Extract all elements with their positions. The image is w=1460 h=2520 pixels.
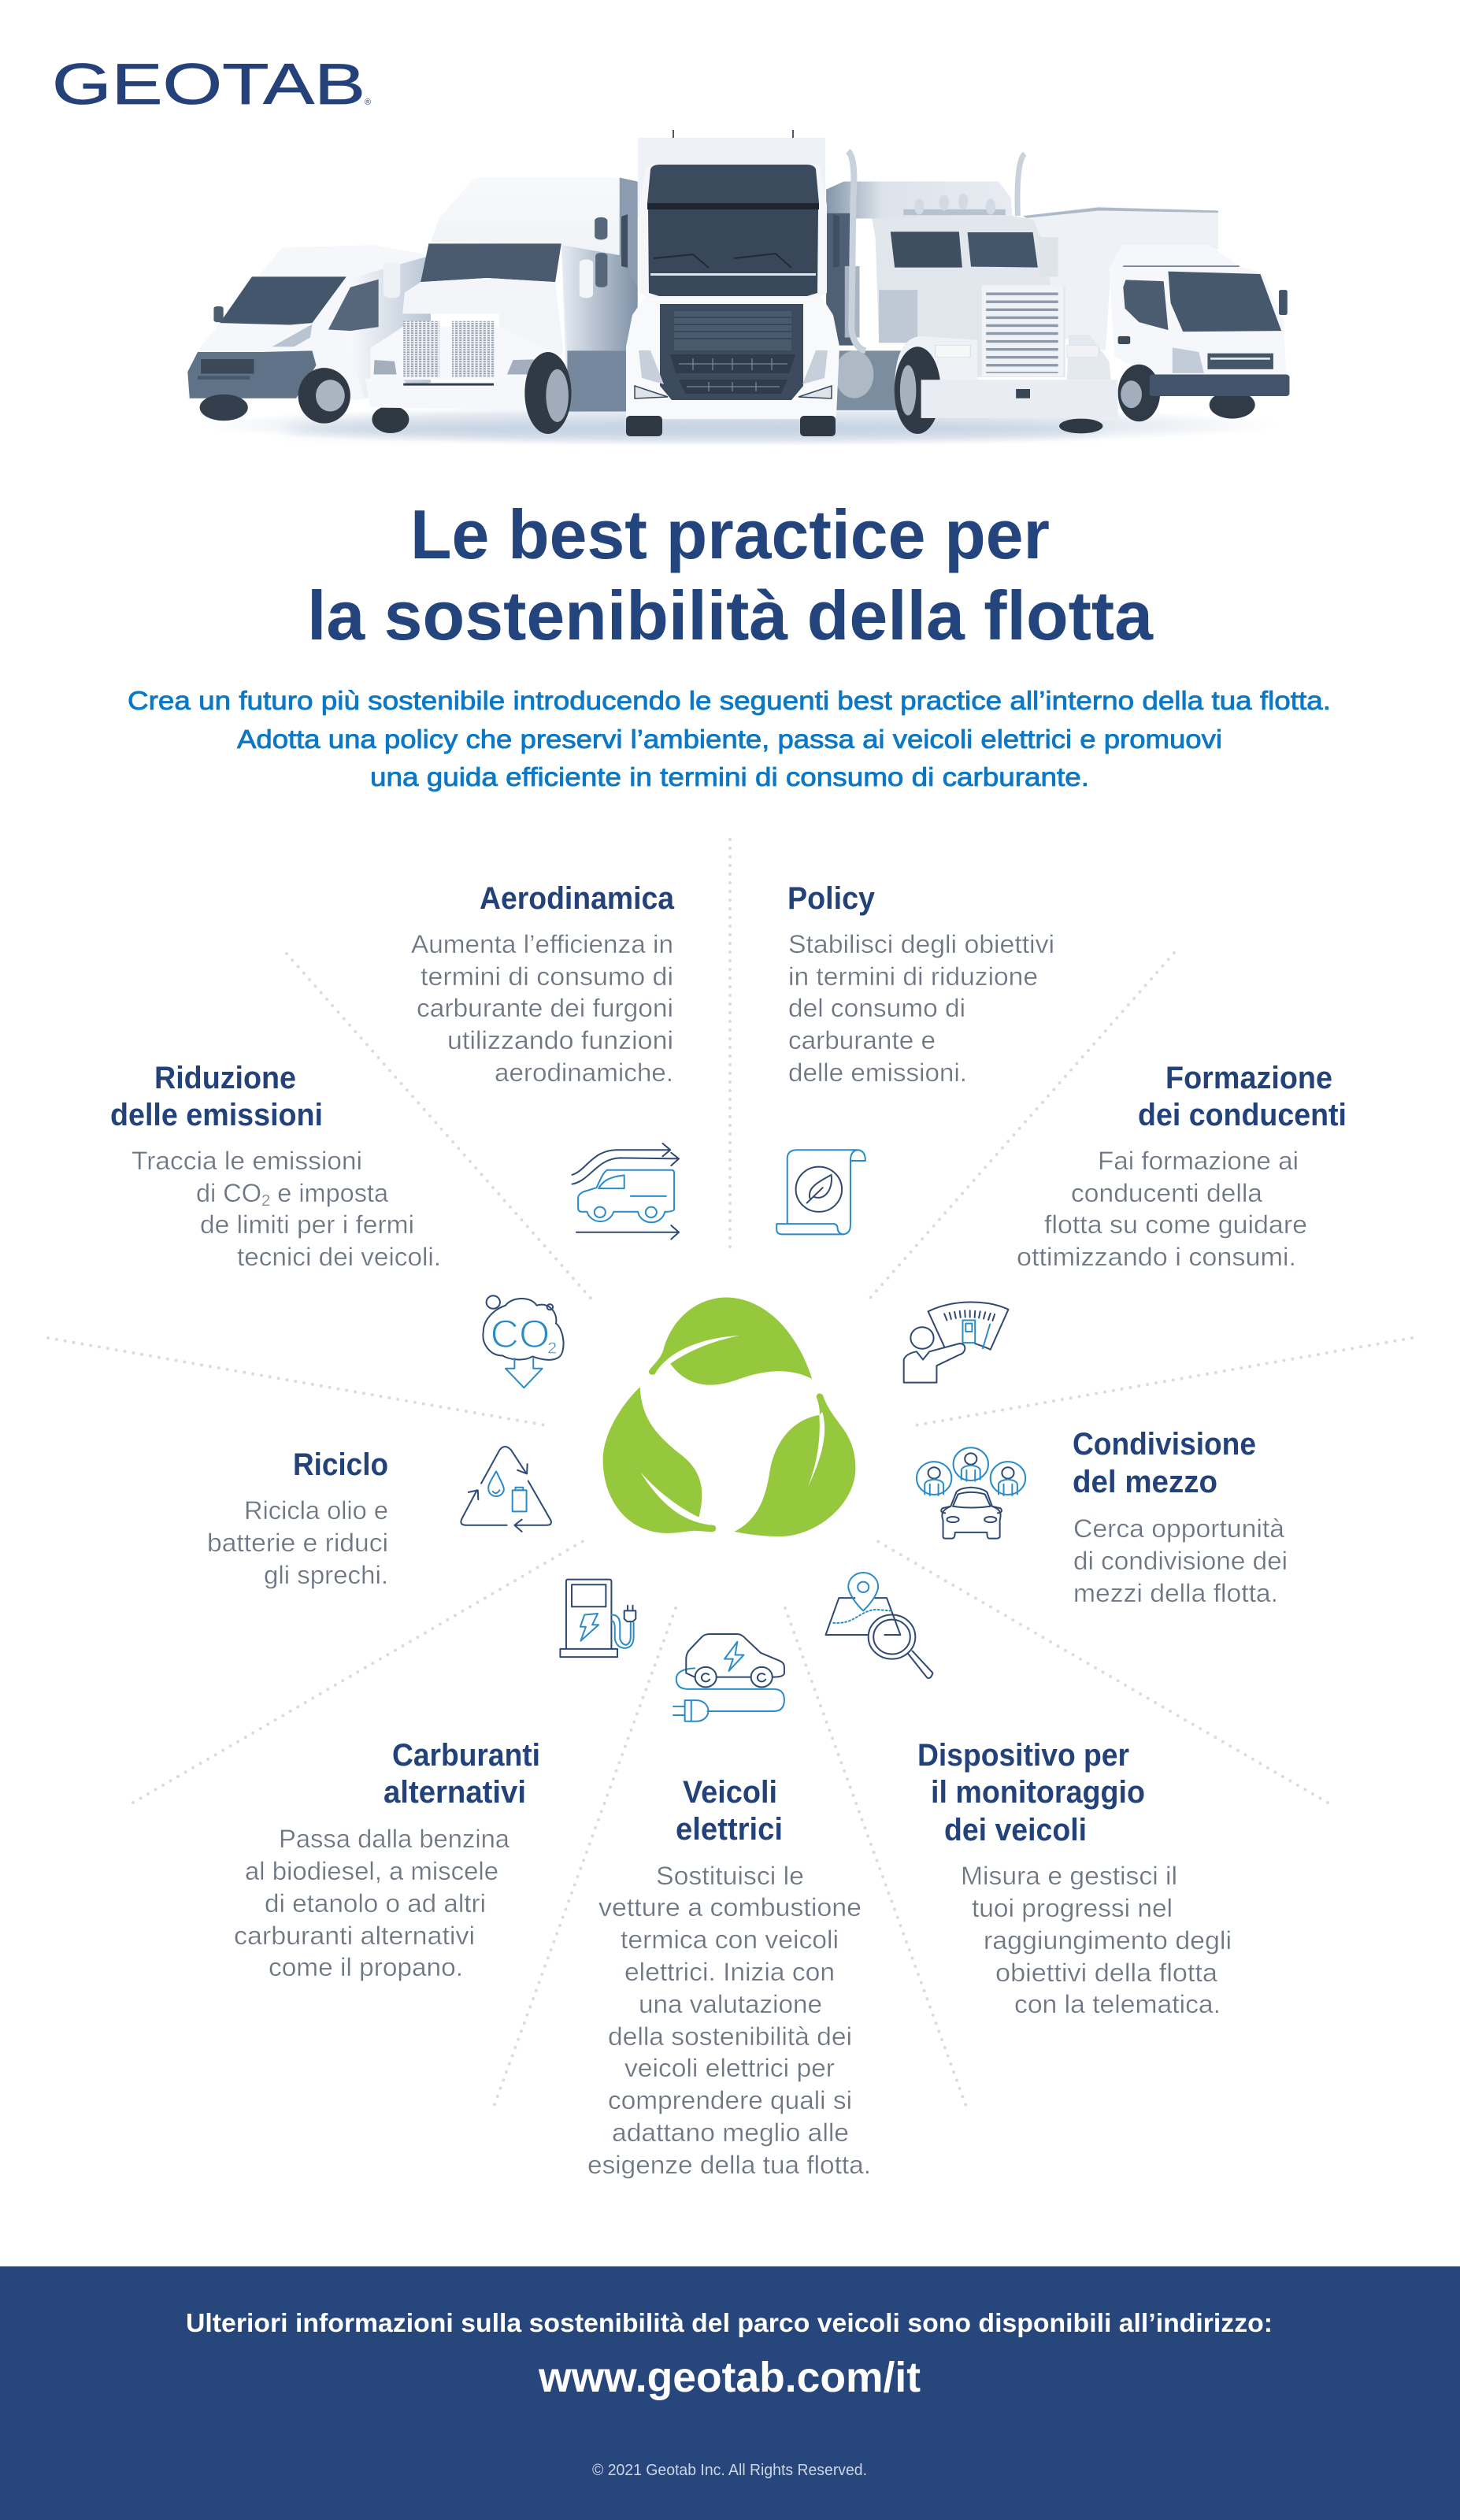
copyright: © 2021 Geotab Inc. All Rights Reserved. bbox=[592, 2462, 867, 2479]
heading: Dispositivo per bbox=[917, 1738, 1129, 1773]
text block: Aumenta l’efficienza in bbox=[411, 930, 673, 958]
heading: alternativi bbox=[384, 1775, 526, 1810]
leaf: top bbox=[649, 1297, 812, 1385]
text block: Cerca opportunità bbox=[1073, 1514, 1284, 1543]
text block bbox=[587, 1862, 871, 2179]
heading: del mezzo bbox=[1073, 1465, 1217, 1499]
panel: Riciclo bbox=[207, 1447, 551, 1589]
text block: carburante e bbox=[788, 1026, 936, 1054]
text block: delle emissioni. bbox=[788, 1058, 967, 1087]
text block: della sostenibilità dei bbox=[608, 2022, 852, 2051]
icon: van with airflow arrows bbox=[573, 1143, 679, 1239]
subtitle bbox=[128, 686, 1331, 791]
icon: CO2 cloud with down arrow bbox=[483, 1295, 564, 1388]
heading: dei veicoli bbox=[944, 1813, 1087, 1847]
text block: utilizzando funzioni bbox=[447, 1026, 673, 1054]
heading: Veicoli bbox=[683, 1775, 777, 1810]
vehicle: aerodynamic semi truck bbox=[365, 178, 638, 434]
text block bbox=[207, 1496, 388, 1589]
icon: policy scroll with leaf bbox=[776, 1150, 865, 1234]
text block: raggiungimento degli bbox=[984, 1926, 1232, 1955]
text block: in termini di riduzione bbox=[788, 962, 1038, 991]
subtitle: Adotta una policy che preservi l’ambiente, passa ai veicoli elettrici e promuovi bbox=[237, 724, 1222, 754]
heading: delle emissioni bbox=[110, 1098, 323, 1132]
icon: recycling triangle with oil drop and battery bbox=[461, 1447, 551, 1532]
footer call to action: Ulteriori informazioni sulla sostenibilità del parco veicoli sono disponibili all’indirizzo: bbox=[186, 2308, 1273, 2337]
heading bbox=[384, 1738, 540, 1810]
text block: adattano meglio alle bbox=[612, 2118, 849, 2147]
text block: gli sprechi. bbox=[264, 1561, 388, 1589]
text block: flotta su come guidare bbox=[1044, 1210, 1307, 1239]
subtitle: una guida efficiente in termini di consumo di carburante. bbox=[370, 762, 1089, 791]
panel: Formazione dei conducenti bbox=[904, 1061, 1347, 1383]
vehicle: front-facing European truck bbox=[621, 130, 839, 436]
text block: termica con veicoli bbox=[621, 1925, 839, 1954]
icon: CO2 cloud with down arrow: CO bbox=[490, 1312, 550, 1356]
text block bbox=[1073, 1514, 1288, 1607]
text block bbox=[411, 930, 673, 1087]
heading: Formazione bbox=[1165, 1061, 1332, 1095]
icon: map pin with magnifier bbox=[826, 1573, 933, 1678]
text block: di condivisione dei bbox=[1073, 1547, 1288, 1575]
text block: carburante dei furgoni bbox=[417, 994, 673, 1022]
ground shadow bbox=[197, 405, 1284, 446]
heading bbox=[110, 1061, 323, 1132]
heading bbox=[917, 1738, 1145, 1847]
text block: e imposta bbox=[270, 1179, 388, 1207]
text block: Stabilisci degli obiettivi bbox=[788, 930, 1054, 958]
text block: Misura e gestisci il bbox=[961, 1862, 1177, 1890]
text block: de limiti per i fermi bbox=[200, 1210, 414, 1239]
text block: veicoli elettrici per bbox=[624, 2054, 835, 2082]
text block: con la telematica. bbox=[1014, 1990, 1221, 2018]
text block: tecnici dei veicoli. bbox=[237, 1243, 441, 1271]
icon: car with three passengers bbox=[917, 1447, 1025, 1539]
icon: electric fuel pump bbox=[560, 1580, 636, 1657]
icon: CO2 cloud with down arrow: 2 bbox=[547, 1340, 557, 1357]
text block: comprendere quali si bbox=[608, 2086, 852, 2114]
text block: Sostituisci le bbox=[656, 1862, 804, 1890]
footer url: www.geotab.com/it bbox=[538, 2354, 921, 2401]
panel: Aerodinamica bbox=[411, 881, 679, 1239]
leaf: bottom left bbox=[603, 1387, 716, 1533]
panel: Dispositivo per il monitoraggio dei veicoli bbox=[826, 1573, 1232, 2018]
text block: batterie e riduci bbox=[207, 1529, 388, 1557]
text block: esigenze della tua flotta. bbox=[587, 2151, 871, 2179]
leaf: right bbox=[735, 1394, 855, 1536]
subtitle: Crea un futuro più sostenibile introducendo le seguenti best practice all’interno della tua flotta. bbox=[128, 686, 1331, 715]
panel: Veicoli elettrici bbox=[587, 1634, 871, 2179]
heading: elettrici bbox=[676, 1812, 783, 1847]
text block: una valutazione bbox=[639, 1990, 822, 2018]
text block: Traccia le emissioni bbox=[132, 1147, 362, 1175]
text block: come il propano. bbox=[269, 1953, 463, 1981]
icon: electric car with plug bbox=[673, 1634, 784, 1721]
heading: Condivisione bbox=[1073, 1427, 1256, 1462]
heading: dei conducenti bbox=[1138, 1098, 1347, 1132]
heading: Riciclo bbox=[293, 1447, 388, 1482]
text block: ottimizzando i consumi. bbox=[1017, 1243, 1296, 1271]
text block: obiettivi della flotta bbox=[995, 1959, 1217, 1987]
vehicle: box truck bbox=[1023, 206, 1289, 421]
heading bbox=[1138, 1061, 1347, 1132]
footer band bbox=[0, 2266, 1460, 2520]
heading bbox=[676, 1775, 783, 1847]
text block: aerodinamiche. bbox=[495, 1058, 673, 1087]
text block: al biodiesel, a miscele bbox=[245, 1857, 498, 1885]
text block: tuoi progressi nel bbox=[972, 1894, 1173, 1922]
text block: 2 bbox=[261, 1192, 270, 1210]
panel: Carburanti alternativi bbox=[234, 1580, 636, 1981]
text block bbox=[788, 930, 1054, 1087]
text block: conducenti della bbox=[1071, 1179, 1262, 1207]
text block: Ricicla olio e bbox=[244, 1496, 388, 1525]
text block: termini di consumo di bbox=[421, 962, 673, 991]
heading bbox=[1073, 1427, 1256, 1499]
text block bbox=[1017, 1147, 1307, 1271]
text block: mezzi della flotta. bbox=[1073, 1579, 1278, 1607]
title bbox=[307, 495, 1154, 654]
text block: Passa dalla benzina bbox=[279, 1825, 510, 1853]
logo: GEOTAB: ® bbox=[365, 98, 371, 107]
title: Le best practice per bbox=[410, 495, 1050, 573]
heading: Carburanti bbox=[392, 1738, 540, 1773]
text block: di etanolo o ad altri bbox=[265, 1889, 486, 1918]
text block: carburanti alternativi bbox=[234, 1922, 475, 1950]
title: la sostenibilità della flotta bbox=[307, 576, 1154, 654]
text block: vetture a combustione bbox=[598, 1893, 862, 1922]
heading: Aerodinamica bbox=[480, 881, 675, 916]
text block bbox=[961, 1862, 1232, 2018]
icon: driver with windshield and dashboard bbox=[904, 1302, 1008, 1383]
vehicle: long-hood truck with stacks bbox=[826, 151, 1118, 434]
heading: il monitoraggio bbox=[931, 1775, 1145, 1810]
vehicle: white van bbox=[187, 245, 431, 424]
heading: Riduzione bbox=[154, 1061, 296, 1095]
text block: del consumo di bbox=[788, 994, 965, 1022]
hero image: fleet of five vehicles bbox=[187, 130, 1289, 446]
heading: Policy bbox=[787, 881, 876, 916]
text block: di CO bbox=[196, 1179, 261, 1207]
text block: Fai formazione ai bbox=[1098, 1147, 1299, 1175]
text block: elettrici. Inizia con bbox=[624, 1958, 835, 1986]
text block bbox=[132, 1147, 441, 1271]
text block bbox=[234, 1825, 510, 1981]
panel: Policy bbox=[776, 881, 1054, 1234]
panel: Condivisione del mezzo bbox=[917, 1427, 1288, 1607]
central recycling leaves icon bbox=[603, 1297, 855, 1536]
logo: GEOTAB: GEOTAB bbox=[52, 53, 365, 117]
panel: Riduzione delle emissioni bbox=[110, 1061, 564, 1388]
